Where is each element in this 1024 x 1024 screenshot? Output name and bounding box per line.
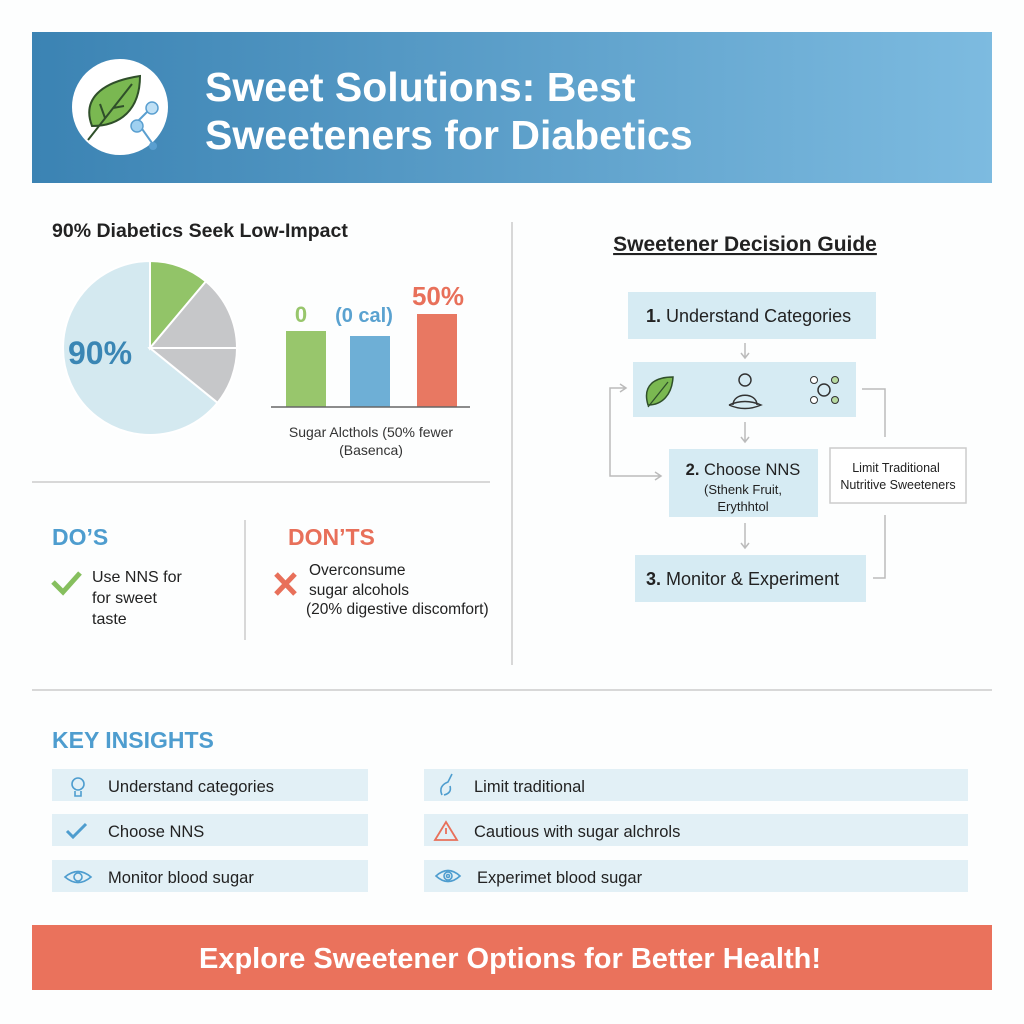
- panel: donts: (20% digestive discomfort): [306, 601, 489, 618]
- panel: donts: Overconsume: [309, 562, 405, 579]
- pie chart: 90%: [68, 335, 132, 371]
- panel: dos: Use NNS for: [92, 569, 182, 586]
- step 2: (Sthenk Fruit,: [704, 482, 782, 497]
- key insights: [52, 727, 968, 892]
- key insights: KEY INSIGHTS: [52, 727, 214, 753]
- title: Sweet Solutions: Best: [205, 64, 636, 110]
- key insights: Cautious with sugar alchrols: [474, 823, 680, 841]
- key insights: Understand categories: [108, 778, 274, 796]
- panel: donts: DON’TS: [288, 524, 375, 550]
- key insights: Monitor blood sugar: [108, 869, 254, 887]
- limit box: [830, 448, 966, 503]
- step 2: 2. Choose NNS: [686, 461, 800, 479]
- panel: dos: taste: [92, 611, 127, 628]
- key insights: Limit traditional: [474, 778, 585, 796]
- header banner: Sweeteners for Diabetics: [205, 112, 693, 158]
- step 2: Erythhtol: [717, 499, 769, 514]
- pie chart: [63, 261, 237, 435]
- bar chart: (Basenca): [339, 442, 403, 458]
- limit box: Nutritive Sweeteners: [840, 478, 956, 492]
- arrows: [610, 343, 885, 578]
- panel: decision guide: [610, 233, 966, 602]
- panel: dos: for sweet: [92, 590, 157, 607]
- key insights: Experimet blood sugar: [477, 869, 643, 887]
- heading: stats: 90% Diabetics Seek Low-Impact: [52, 220, 348, 242]
- step 2: [669, 449, 818, 517]
- bar chart: 0: [295, 302, 307, 327]
- step 1: 1. Understand Categories: [646, 306, 851, 326]
- header banner: [32, 32, 992, 183]
- panel: dos: [52, 524, 182, 628]
- footer banner: Explore Sweetener Options for Better Health!: [199, 943, 821, 975]
- key insights: Choose NNS: [108, 823, 204, 841]
- bar chart: 50%: [412, 281, 464, 311]
- icon: leaf logo: [72, 59, 168, 155]
- bar chart: (0 cal): [335, 305, 393, 327]
- panel: decision guide: Sweetener Decision Guide: [613, 233, 877, 256]
- icon: cross: [276, 574, 295, 594]
- footer banner: [32, 925, 992, 990]
- step 3: 3. Monitor & Experiment: [646, 569, 839, 589]
- bar chart: Sugar Alcthols (50% fewer: [289, 424, 453, 440]
- bar chart: [271, 281, 470, 458]
- panel: donts: sugar alcohols: [309, 582, 409, 599]
- icon: check: [53, 573, 80, 592]
- icons box: [633, 362, 856, 417]
- step 3: [635, 555, 866, 602]
- panel: donts: [276, 524, 489, 618]
- panel: dos: DO’S: [52, 524, 108, 550]
- limit box: Limit Traditional: [852, 461, 940, 475]
- step 1: [628, 292, 876, 339]
- panel: stats: [52, 220, 470, 458]
